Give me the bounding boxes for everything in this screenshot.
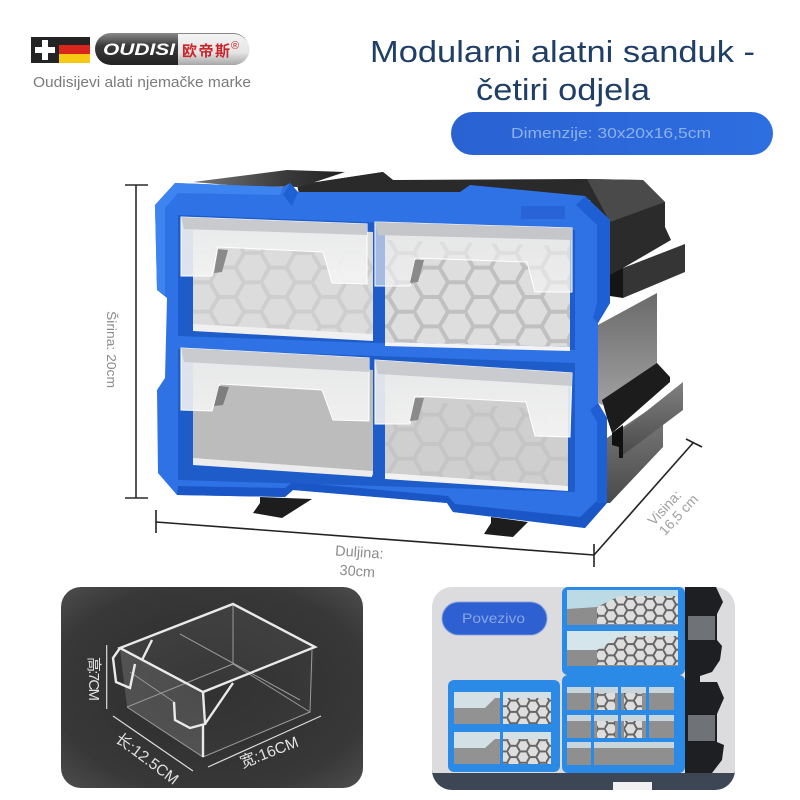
panel background: [61, 587, 363, 788]
label: length: 长:12.5CM: [112, 730, 182, 788]
clear drawer: [113, 604, 315, 757]
label: length: Duljina:: [335, 543, 384, 563]
title: Modularni alatni sanduk -: [370, 34, 755, 69]
brand tagline: Oudisijevi alati njemačke marke: [33, 75, 251, 91]
depth dimension line: [594, 439, 702, 555]
dimensions pill: Dimenzije: 30x20x16,5cm: [511, 125, 711, 142]
icon: German flag: [59, 37, 90, 63]
title second line: četiri odjela: [476, 72, 651, 107]
upper mounting rail: [610, 244, 685, 298]
drawer: top left: [181, 217, 373, 341]
label: length: 30cm: [339, 563, 376, 581]
connector pill: [442, 602, 547, 635]
product: four-drawer tool box: [155, 170, 685, 537]
height dimension line: [125, 185, 148, 498]
bottom feet: [253, 497, 528, 537]
top module: [562, 587, 685, 675]
lower mounting rail: [602, 363, 683, 458]
connector pill: Povezivo: [462, 610, 525, 626]
bottom left module: [448, 680, 560, 772]
side highlights: [688, 616, 715, 741]
shelf: [432, 770, 735, 790]
label: depth: 16,5 cm: [656, 491, 701, 538]
dark module sides: [685, 587, 724, 773]
icon: cross badge: [31, 37, 59, 63]
length line: [113, 716, 193, 771]
drawer: top right: [375, 222, 572, 351]
dimensions pill: [451, 112, 773, 155]
label: length: [335, 543, 384, 581]
panel: single drawer: [61, 587, 363, 788]
bottom right module: [562, 675, 685, 773]
drawer: bottom left: [181, 348, 373, 477]
panel: stacked modules: [432, 587, 735, 790]
horizontal divider: [178, 336, 575, 363]
logo pill: OUDISI: [103, 40, 177, 59]
panel background: [432, 587, 735, 790]
label: depth: Visina:: [644, 487, 684, 528]
label plate: [613, 782, 652, 790]
logo pill: [95, 33, 250, 65]
dark rear housing: [193, 170, 671, 503]
frame shading: [155, 183, 610, 528]
blue frame: [155, 183, 610, 528]
logo pill: 欧帝斯: [182, 40, 230, 61]
logo pill: ®: [231, 40, 239, 52]
height line: [106, 645, 108, 709]
length dimension line: [156, 510, 594, 567]
brand logo: [31, 33, 250, 65]
label: height: 高:7CM: [85, 657, 102, 701]
width line: [208, 716, 321, 767]
window recess: [178, 215, 575, 492]
label: width: Širina: 20cm: [104, 311, 119, 388]
label: width: 宽:16CM: [237, 733, 301, 772]
drawer: bottom right: [375, 360, 572, 491]
